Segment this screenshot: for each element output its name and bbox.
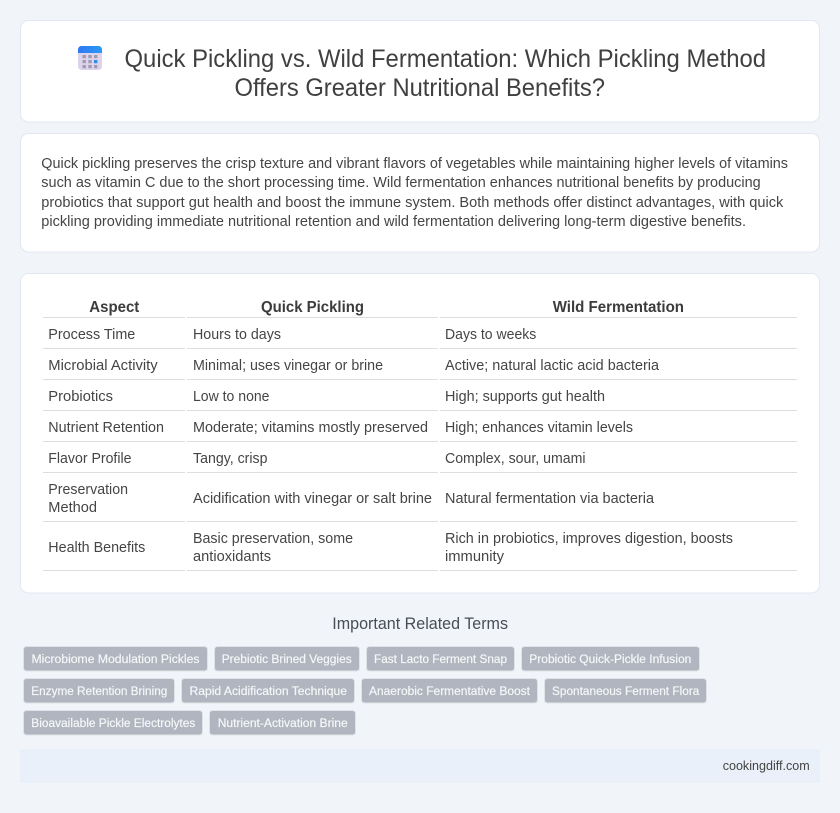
row: process time: Days to weeks [445, 327, 536, 343]
tag: Fast Lacto Ferment Snap [374, 652, 507, 666]
table header row: Wild Fermentation [553, 299, 684, 316]
title [124, 46, 766, 102]
row: health benefits [48, 531, 733, 565]
row: flavor profile: Complex, sour, umami [445, 451, 586, 467]
tag [210, 710, 356, 735]
tag [362, 678, 538, 703]
row: microbial activity: Microbial Activity [48, 358, 158, 374]
table header row: Quick Pickling [261, 299, 364, 316]
text block: summary: such as vitamin C due to the short processing time. Wild fermentation enhances nutritional benefits by producing [41, 175, 761, 191]
tag [214, 646, 360, 671]
row: preservation method: Natural fermentation via bacteria [445, 491, 655, 507]
tag: Microbiome Modulation Pickles [32, 652, 200, 666]
row: probiotics: High; supports gut health [445, 389, 605, 405]
tag: Anaerobic Fermentative Boost [369, 684, 531, 698]
tag: Spontaneous Ferment Flora [552, 684, 699, 698]
tag [24, 646, 208, 671]
text block: summary: probiotics that support gut health and boost the immune system. Both methods offer distinct advantages, with quick [41, 195, 784, 211]
tag [366, 646, 514, 671]
row: microbial activity: Minimal; uses vinegar or brine [193, 358, 383, 374]
table header row: Aspect [89, 299, 140, 316]
row: nutrient retention: Moderate; vitamins mostly preserved [193, 420, 428, 436]
row: health benefits: Health Benefits [48, 540, 145, 556]
tag [182, 678, 354, 703]
title: Quick Pickling vs. Wild Fermentation: Which Pickling Method [124, 46, 766, 73]
row: health benefits: Basic preservation, some [193, 531, 353, 547]
row: preservation method: Method [48, 500, 97, 516]
panel: related term tags [24, 646, 706, 735]
tag [544, 678, 706, 703]
row: nutrient retention: Nutrient Retention [48, 420, 164, 436]
tag: Rapid Acidification Technique [190, 684, 347, 698]
row: probiotics: Probiotics [48, 389, 113, 405]
row: process time [48, 327, 536, 343]
footer: cookingdiff.com [723, 758, 810, 773]
row: flavor profile [48, 451, 586, 467]
text block: summary: pickling providing immediate nutritional retention and wild fermentation delivering long-term digestive benefits. [41, 214, 746, 230]
row: microbial activity: Active; natural lactic acid bacteria [445, 358, 660, 374]
tag: Enzyme Retention Brining [31, 684, 167, 698]
row: process time: Hours to days [193, 327, 281, 343]
footer [20, 749, 820, 783]
table header row [89, 299, 684, 316]
text block: summary [41, 156, 788, 230]
tag [24, 710, 202, 735]
heading: important related terms: Important Related Terms [332, 615, 508, 633]
row: health benefits: antioxidants [193, 549, 271, 565]
row: process time: Process Time [48, 327, 135, 343]
row: preservation method [48, 482, 655, 516]
tag [522, 646, 700, 671]
title: Offers Greater Nutritional Benefits? [234, 75, 605, 102]
panel: title card [20, 20, 820, 122]
row: flavor profile: Tangy, crisp [193, 451, 268, 467]
text block: summary: Quick pickling preserves the crisp texture and vibrant flavors of vegetables while maintaining higher levels of vitamins [41, 156, 788, 172]
row: health benefits: immunity [445, 549, 505, 565]
row: probiotics [48, 389, 605, 405]
row: nutrient retention: High; enhances vitamin levels [445, 420, 633, 436]
tag [24, 678, 174, 703]
tag: Nutrient-Activation Brine [218, 716, 348, 730]
row: flavor profile: Flavor Profile [48, 451, 131, 467]
row: probiotics: Low to none [193, 389, 270, 405]
row: health benefits: Rich in probiotics, improves digestion, boosts [445, 531, 733, 547]
icon: calendar [78, 46, 102, 70]
row: microbial activity [48, 358, 660, 374]
row: preservation method: Preservation [48, 482, 128, 498]
panel: comparison table [20, 274, 820, 593]
tag: Probiotic Quick-Pickle Infusion [529, 652, 691, 666]
tag: Bioavailable Pickle Electrolytes [31, 716, 195, 730]
tag: Prebiotic Brined Veggies [222, 652, 352, 666]
panel: summary paragraph [20, 134, 820, 252]
row: nutrient retention [48, 420, 633, 436]
row: preservation method: Acidification with vinegar or salt brine [193, 491, 432, 507]
